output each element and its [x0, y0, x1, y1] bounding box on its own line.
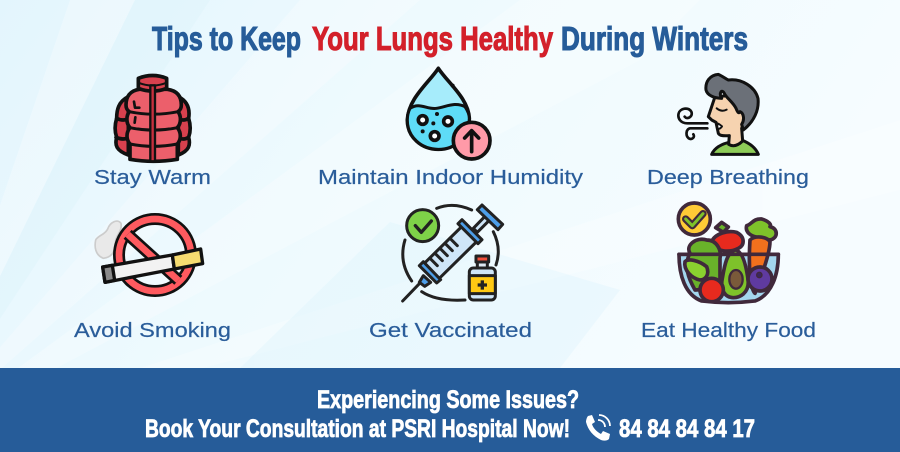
label: Maintain Indoor Humidity: Maintain Indoor Humidity — [318, 166, 584, 189]
label: Stay Warm: Stay Warm — [94, 166, 211, 189]
title: Your Lungs Healthy — [312, 20, 554, 57]
footer question: Experiencing Some Issues? — [317, 386, 579, 414]
title: Tips to Keep — [152, 20, 301, 57]
label: Avoid Smoking: Avoid Smoking — [74, 319, 231, 342]
icon: syringe and vial — [403, 205, 503, 301]
title: During Winters — [561, 20, 748, 57]
icon: water drop with up arrow — [407, 68, 490, 159]
title — [152, 20, 748, 57]
label: Deep Breathing: Deep Breathing — [647, 166, 809, 189]
footer call to action: Book Your Consultation at PSRI Hospital Now! — [145, 415, 570, 443]
icon: man breathing out — [678, 74, 758, 154]
label: Eat Healthy Food: Eat Healthy Food — [641, 319, 816, 342]
icon: bowl of healthy food — [678, 203, 778, 303]
phone number: 84 84 84 84 17 — [619, 415, 755, 443]
footer banner — [0, 368, 900, 452]
label: Get Vaccinated: Get Vaccinated — [369, 319, 532, 342]
icon: red puffer jacket — [115, 75, 190, 161]
icon: no smoking sign — [95, 219, 203, 291]
icon: phone — [586, 415, 610, 441]
